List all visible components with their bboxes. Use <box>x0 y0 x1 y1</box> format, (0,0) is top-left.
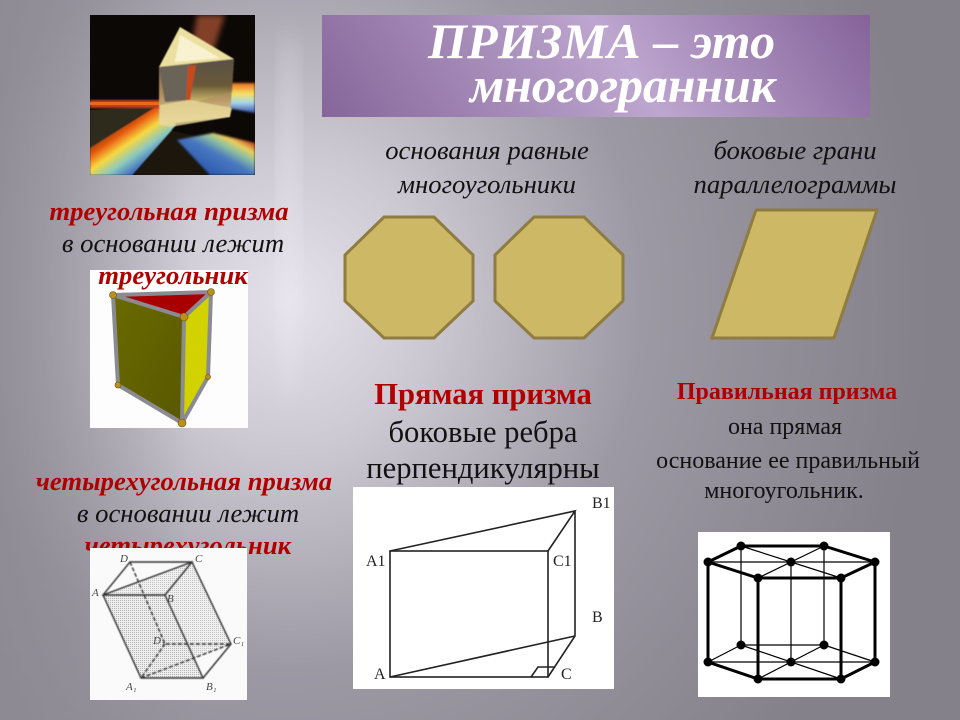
image: right prism diagram: C <box>561 666 572 683</box>
shape: octagon left <box>345 217 473 338</box>
text: quadrilateral prism: в основании лежит <box>77 498 299 528</box>
image: quadrilateral prism: A₁ <box>125 681 137 693</box>
shape: octagon right <box>495 217 623 338</box>
text: lateral faces: параллелограммы <box>693 169 897 199</box>
text: regular prism: Правильная призма <box>677 379 897 405</box>
text: quadrilateral prism <box>36 466 332 560</box>
image: quadrilateral prism: C₁ <box>233 635 244 647</box>
image: quadrilateral prism <box>90 548 247 700</box>
label: triangle word: треугольник <box>98 260 249 290</box>
text: triangular prism: треугольная призма <box>49 196 289 226</box>
image: right prism diagram: B1 <box>592 495 611 512</box>
text: quadrilateral prism: четырехугольная призма <box>36 466 332 496</box>
text: right prism: перпендикулярны <box>366 451 600 485</box>
title text: многогранник <box>468 57 778 113</box>
text: bases: основания равные <box>385 135 589 165</box>
image: triangular prism <box>90 270 248 428</box>
image: right prism diagram <box>353 487 614 689</box>
shape: parallelogram <box>712 210 877 338</box>
image: quadrilateral prism: B₁ <box>206 681 217 693</box>
title banner <box>322 13 870 117</box>
image: quadrilateral prism: A <box>91 587 99 599</box>
text: right prism: Прямая призма <box>374 377 592 411</box>
text: regular prism: основание ее правильный <box>656 448 920 474</box>
image: right prism diagram: A1 <box>366 553 386 570</box>
image: quadrilateral prism: C <box>195 553 203 565</box>
text: triangular prism: в основании лежит <box>62 228 284 258</box>
text: regular prism <box>656 379 920 504</box>
text: triangular prism <box>49 196 289 258</box>
image: quadrilateral prism: D <box>119 553 128 565</box>
image: quadrilateral prism: B <box>167 593 174 605</box>
text: quadrilateral prism: четырехугольник <box>85 530 293 560</box>
text: bases: многоугольники <box>397 169 576 199</box>
text: right prism <box>366 377 600 485</box>
text: right prism: боковые ребра <box>388 415 578 449</box>
image: quadrilateral prism: D₁ <box>152 635 165 647</box>
title text: ПРИЗМА – это <box>427 13 775 69</box>
text: regular prism: многоугольник. <box>704 478 864 504</box>
text: lateral faces: боковые грани <box>713 135 877 165</box>
text: regular prism: она прямая <box>728 414 842 440</box>
image: hexagonal prism diagram <box>698 532 890 697</box>
photo: glass prism with rainbow <box>90 15 255 175</box>
image: right prism diagram: B <box>592 609 603 626</box>
image: right prism diagram: C1 <box>553 553 572 570</box>
image: right prism diagram: A <box>374 666 386 683</box>
